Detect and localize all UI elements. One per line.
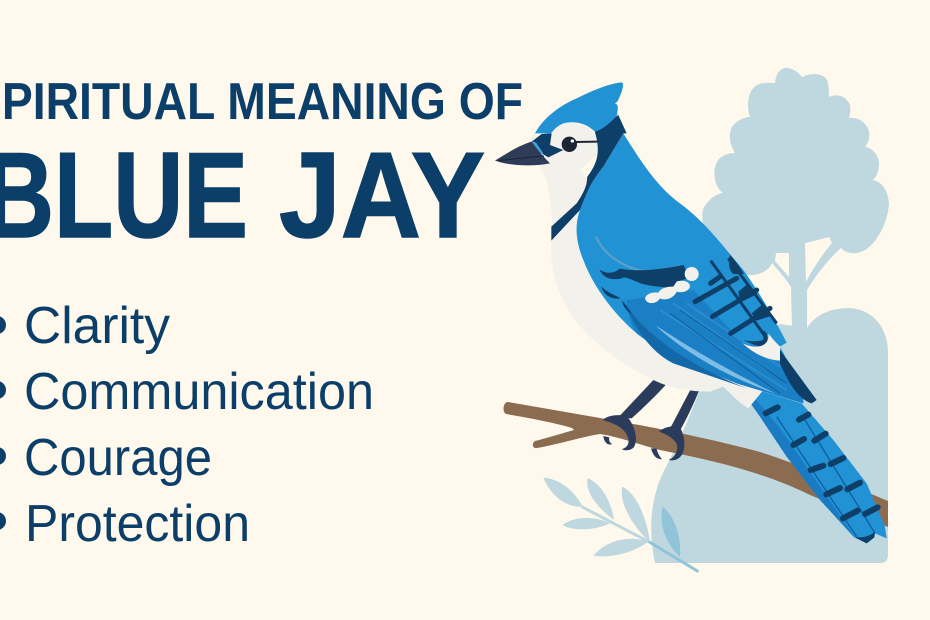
bird legs and feet	[603, 379, 699, 460]
bird small wing mark	[601, 287, 632, 313]
bird tail	[737, 383, 887, 543]
list item: Courage: Courage	[24, 429, 212, 487]
tree branch perch	[504, 402, 888, 527]
bird white wing spots	[645, 267, 699, 303]
bird dark primary tip	[780, 350, 817, 403]
bird white belly and face	[538, 120, 763, 408]
bird dark collar	[551, 115, 627, 241]
list item: Communication: Communication	[24, 363, 374, 421]
bird eye	[562, 137, 597, 152]
bird beak	[495, 142, 550, 165]
heading: Blue Jay	[0, 127, 485, 263]
background illustration: tree silhouette	[702, 68, 889, 330]
bird crest	[532, 82, 623, 142]
bullet list of meanings	[0, 297, 374, 553]
bird eye mask	[532, 133, 563, 157]
bird dark wing band	[599, 265, 688, 288]
bird wing shading texture	[596, 237, 680, 272]
plant sprig	[543, 478, 697, 571]
bird blue beak patch	[532, 141, 543, 153]
bird secondary feathers	[623, 290, 803, 403]
bird white wing crescent	[743, 333, 780, 361]
background illustration: tree branch gaps	[775, 237, 832, 282]
list item: Clarity: Clarity	[24, 297, 170, 355]
blue jay illustration	[495, 82, 887, 543]
heading: Blue Jay: JAY	[279, 127, 485, 263]
bird primary feather checks	[695, 255, 780, 347]
background illustration: rounded hill	[651, 308, 888, 563]
bird blue back and wing	[577, 133, 803, 403]
list item: Protection: Protection	[25, 495, 250, 553]
